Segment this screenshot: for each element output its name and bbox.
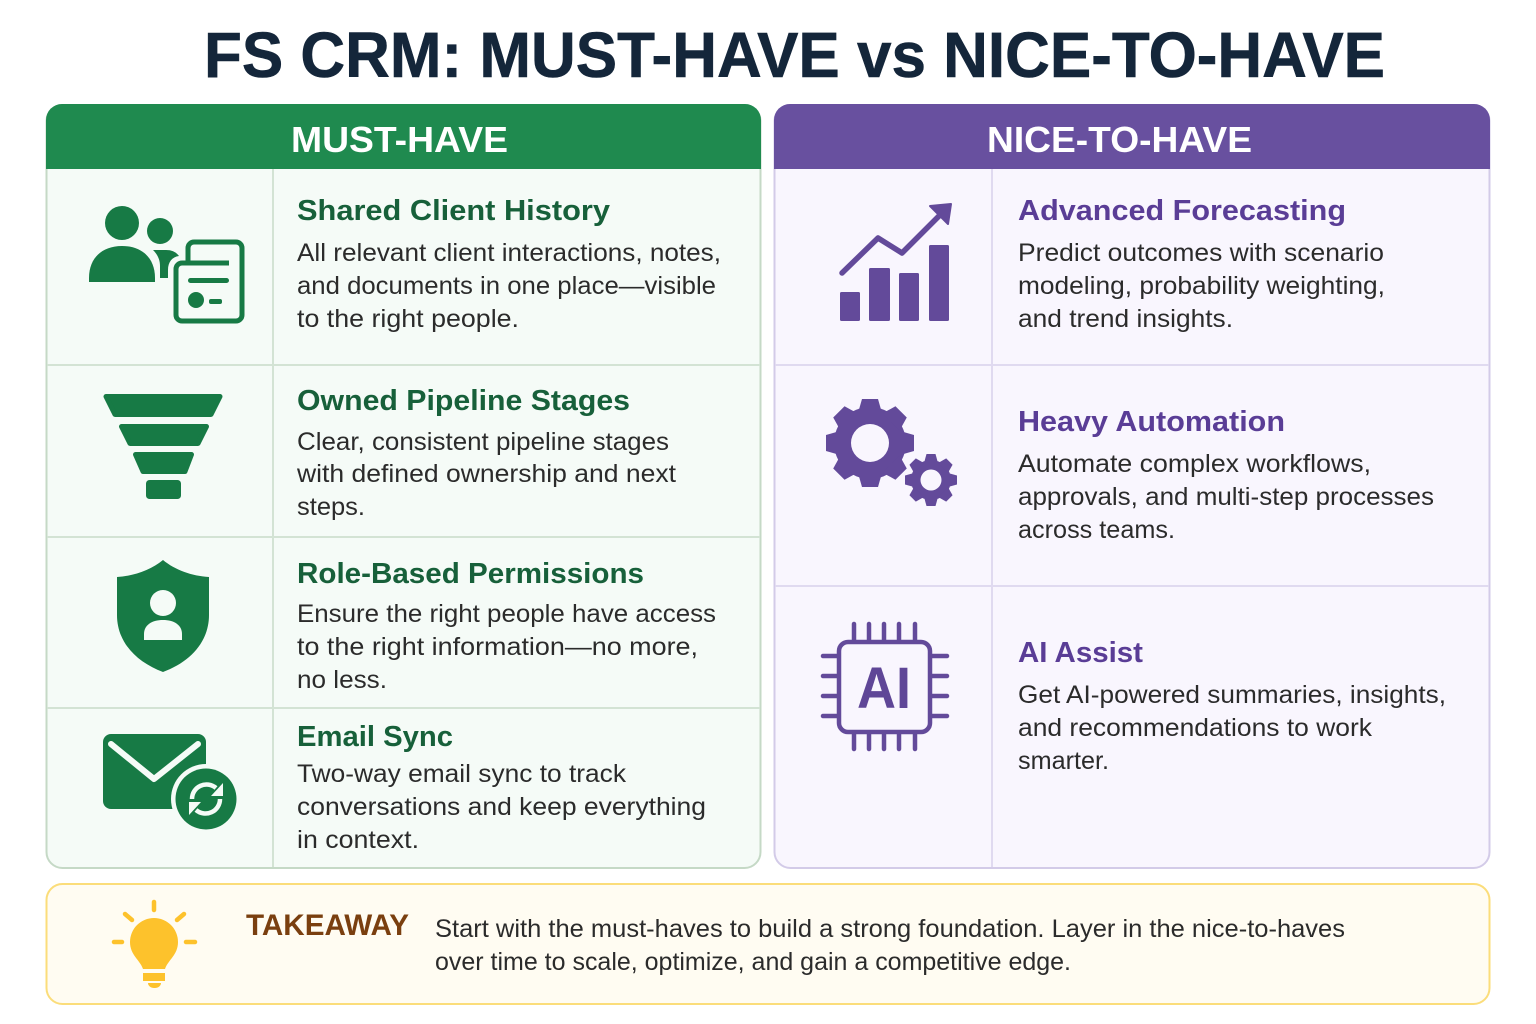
text: heavy automation: across teams.	[1018, 516, 1175, 544]
icon: AI chip: AI	[857, 656, 911, 721]
text: email sync: Email Sync	[297, 721, 453, 753]
text: AI assist: AI Assist	[1018, 637, 1143, 669]
must-have header	[46, 104, 761, 169]
text: owned pipeline stages: Owned Pipeline Stages	[297, 385, 630, 417]
icon: funnel	[106, 396, 220, 496]
text: shared client history	[297, 195, 721, 333]
text: shared client history: Shared Client History	[297, 195, 610, 227]
text: role-based permissions: to the right information—no more,	[297, 633, 698, 661]
nice-to-have header: NICE-TO-HAVE	[987, 119, 1252, 160]
text: role-based permissions	[297, 558, 716, 694]
text: owned pipeline stages: Clear, consistent pipeline stages	[297, 428, 669, 456]
icon: people with document	[89, 206, 242, 321]
text: role-based permissions: no less.	[297, 666, 387, 694]
nice-to-have header	[774, 104, 1490, 169]
text: AI assist	[1018, 637, 1446, 775]
takeaway label: TAKEAWAY	[246, 909, 409, 942]
icon: shield with person	[117, 560, 209, 672]
text: advanced forecasting: Predict outcomes with scenario	[1018, 239, 1384, 267]
text: shared client history: to the right people.	[297, 305, 519, 333]
text: shared client history: All relevant client interactions, notes,	[297, 239, 721, 267]
text: heavy automation	[1018, 406, 1434, 544]
text: AI assist: smarter.	[1018, 747, 1109, 775]
must-have header: MUST-HAVE	[291, 119, 508, 160]
text: email sync: conversations and keep everything	[297, 793, 706, 821]
text: AI assist: Get AI-powered summaries, insights,	[1018, 681, 1446, 709]
icon: gears	[826, 399, 957, 506]
panel: must-have	[46, 104, 761, 868]
text: role-based permissions: Ensure the right people have access	[297, 600, 716, 628]
text: heavy automation: approvals, and multi-step processes	[1018, 483, 1434, 511]
takeaway text	[435, 915, 1345, 976]
text: advanced forecasting: modeling, probability weighting,	[1018, 272, 1385, 300]
icon: light bulb	[114, 902, 195, 988]
text: email sync: in context.	[297, 826, 419, 854]
icon: email sync	[103, 734, 241, 834]
text: advanced forecasting: and trend insights.	[1018, 305, 1233, 333]
text: email sync: Two-way email sync to track	[297, 760, 627, 788]
takeaway text: Start with the must-haves to build a strong foundation. Layer in the nice-to-haves	[435, 915, 1345, 943]
text: owned pipeline stages	[296, 385, 676, 521]
panel: takeaway	[46, 884, 1490, 1004]
text: advanced forecasting: Advanced Forecasting	[1018, 195, 1346, 227]
title: FS CRM: MUST-HAVE vs NICE-TO-HAVE	[204, 19, 1385, 91]
icon: growth chart	[840, 204, 951, 321]
takeaway text: over time to scale, optimize, and gain a competitive edge.	[435, 948, 1071, 976]
text: heavy automation: Heavy Automation	[1018, 406, 1285, 438]
text: advanced forecasting	[1018, 195, 1385, 333]
panel: nice-to-have	[774, 104, 1490, 868]
text: role-based permissions: Role-Based Permissions	[297, 558, 644, 590]
text: email sync	[297, 721, 706, 854]
icon: AI chip	[823, 624, 947, 749]
text: owned pipeline stages: steps.	[297, 493, 365, 521]
text: owned pipeline stages: with defined ownership and next	[296, 460, 676, 488]
text: shared client history: and documents in one place—visible	[297, 272, 716, 300]
text: AI assist: and recommendations to work	[1018, 714, 1373, 742]
text: heavy automation: Automate complex workflows,	[1018, 450, 1371, 478]
